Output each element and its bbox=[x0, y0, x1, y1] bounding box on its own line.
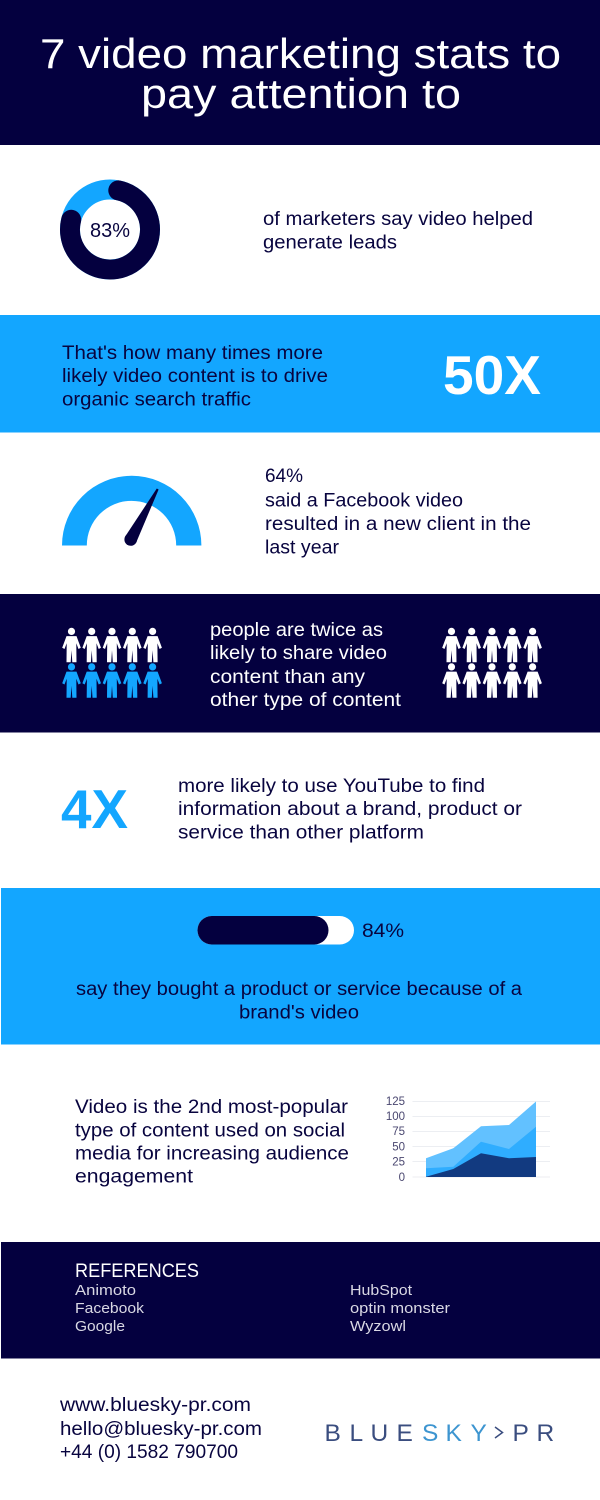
text: organic search stat bbox=[62, 343, 328, 410]
panel: 50X organic search bbox=[0, 315, 600, 432]
contact details: hello@bluesky-pr.com bbox=[60, 1419, 262, 1440]
panel: references bbox=[1, 1242, 600, 1358]
text: Facebook stat bbox=[265, 466, 531, 558]
text: engagement stat: type of content used on social bbox=[75, 1120, 345, 1142]
area chart: 100 bbox=[386, 1111, 405, 1123]
area chart: 50 bbox=[392, 1142, 405, 1154]
text: share stat: other type of content bbox=[210, 690, 402, 711]
header banner bbox=[0, 0, 600, 145]
donut chart: 83% bbox=[70, 190, 150, 270]
heading: references: REFERENCES bbox=[75, 1261, 199, 1282]
reference list: left column: Animoto bbox=[75, 1282, 136, 1299]
text: organic search stat: That's how many times more bbox=[62, 343, 323, 364]
title bbox=[40, 30, 561, 117]
big number: 50X: 50X bbox=[443, 344, 541, 406]
progress bar: 84%: 84% bbox=[362, 921, 404, 942]
text: YouTube stat: service than other platform bbox=[178, 822, 424, 843]
panel: share video content bbox=[0, 594, 600, 732]
text: YouTube stat bbox=[178, 776, 523, 843]
donut chart: 83%: 83% bbox=[90, 220, 130, 242]
text: marketers stat: generate leads bbox=[263, 232, 397, 253]
reference list: left column: Google bbox=[75, 1318, 125, 1335]
contact details: www.bluesky-pr.com bbox=[59, 1395, 251, 1416]
contact details: +44 (0) 1582 790700 bbox=[60, 1442, 238, 1463]
panel: 84% bought a product bbox=[1, 888, 600, 1044]
logo: Bluesky PR: PR bbox=[512, 1420, 554, 1447]
text: share stat: content than any bbox=[210, 667, 366, 688]
text: share stat bbox=[210, 620, 402, 711]
reference list: right column: optin monster bbox=[350, 1300, 450, 1317]
logo: Bluesky PR bbox=[324, 1420, 554, 1447]
big number: 4X: 4X bbox=[61, 778, 128, 840]
text: organic search stat: likely video content is to drive bbox=[62, 366, 328, 387]
text: Facebook stat: resulted in a new client in the bbox=[265, 514, 531, 535]
panel: 64% Facebook video bbox=[62, 466, 531, 558]
icon: gauge bbox=[62, 476, 201, 546]
text: purchase stat: brand's video bbox=[239, 1002, 359, 1023]
text: marketers stat: of marketers say video helped bbox=[263, 209, 533, 230]
title: 7 video marketing stats to bbox=[40, 30, 561, 77]
text: organic search stat: organic search traffic bbox=[62, 389, 251, 410]
icon: people left group bbox=[62, 628, 162, 698]
text: engagement stat bbox=[75, 1097, 349, 1187]
panel: social media engagement bbox=[75, 1096, 550, 1187]
text: share stat: likely to share video bbox=[210, 643, 387, 664]
reference list: right column: Wyzowl bbox=[350, 1318, 406, 1335]
reference list: left column: Facebook bbox=[75, 1300, 145, 1317]
progress bar: 84% bbox=[198, 916, 404, 944]
text: engagement stat: media for increasing audience bbox=[75, 1143, 349, 1164]
area chart: 25 bbox=[392, 1156, 405, 1168]
contact details bbox=[59, 1395, 262, 1463]
text: marketers stat bbox=[263, 209, 533, 253]
area chart: 75 bbox=[392, 1126, 405, 1138]
text: Facebook stat: said a Facebook video bbox=[265, 490, 463, 512]
title: pay attention to bbox=[141, 70, 461, 117]
text: purchase stat: say they bought a product or service because of a bbox=[76, 979, 522, 1000]
reference list: right column bbox=[350, 1282, 450, 1335]
text: engagement stat: Video is the 2nd most-popular bbox=[75, 1097, 349, 1118]
area chart bbox=[386, 1096, 550, 1184]
panel: footer bbox=[59, 1395, 554, 1463]
panel: 4X YouTube bbox=[61, 776, 523, 843]
area chart: 0 bbox=[399, 1172, 405, 1184]
reference list: right column: HubSpot bbox=[350, 1282, 413, 1299]
text: share stat: people are twice as bbox=[210, 620, 383, 641]
logo: Bluesky PR: BLUE bbox=[324, 1420, 413, 1447]
text: Facebook stat: 64% bbox=[265, 466, 303, 487]
text: purchase stat bbox=[76, 979, 522, 1023]
panel: 83% of marketers bbox=[70, 190, 533, 270]
area chart: 125 bbox=[386, 1096, 405, 1108]
text: Facebook stat: last year bbox=[265, 537, 340, 558]
text: engagement stat: engagement bbox=[75, 1166, 194, 1187]
logo: Bluesky PR: SKY bbox=[422, 1420, 487, 1447]
text: YouTube stat: more likely to use YouTube to find bbox=[178, 776, 485, 797]
reference list: left column bbox=[75, 1282, 145, 1335]
icon: people right group bbox=[442, 628, 542, 698]
text: YouTube stat: information about a brand, product or bbox=[178, 799, 523, 820]
